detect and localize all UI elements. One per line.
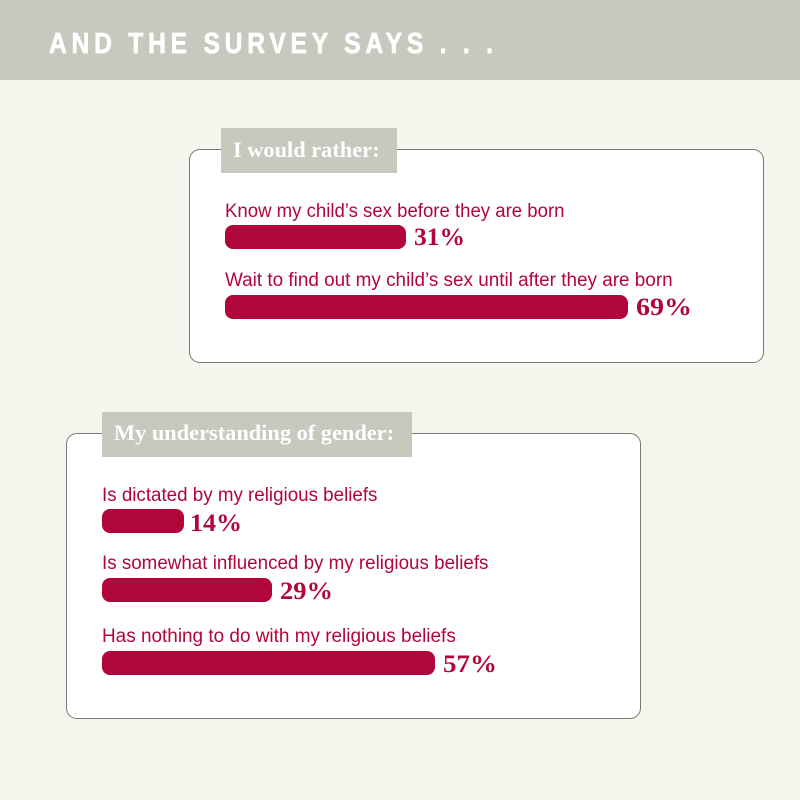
panel card — [66, 433, 641, 719]
bar: 14% — [102, 509, 184, 533]
panel card — [189, 149, 764, 363]
panel: my understanding of gender — [66, 412, 641, 719]
heading text: I would rather: — [233, 137, 380, 162]
value: 69%: 69% — [636, 294, 692, 321]
panel heading — [221, 128, 397, 173]
heading text: My understanding of gender: — [114, 420, 394, 445]
bar: 57% — [102, 651, 435, 675]
bar: 29% — [102, 578, 272, 602]
value: 31%: 31% — [414, 224, 465, 251]
bar: 69% — [225, 295, 628, 319]
header banner — [0, 0, 800, 80]
label: nothing: Has nothing to do with my religious beliefs — [102, 626, 456, 647]
panel: I would rather — [189, 128, 764, 363]
value: 29%: 29% — [280, 578, 333, 605]
value: 14%: 14% — [190, 510, 242, 537]
bar: 31% — [225, 225, 406, 249]
value: 57%: 57% — [443, 651, 497, 678]
panel heading — [102, 412, 412, 457]
label: somewhat: Is somewhat influenced by my religious beliefs — [102, 553, 488, 574]
label: wait: Wait to find out my child’s sex until after they are born — [225, 270, 673, 291]
title: AND THE SURVEY SAYS . . . — [49, 28, 498, 60]
label: dictated: Is dictated by my religious beliefs — [102, 485, 377, 506]
label: know sex: Know my child’s sex before they are born — [225, 201, 564, 222]
